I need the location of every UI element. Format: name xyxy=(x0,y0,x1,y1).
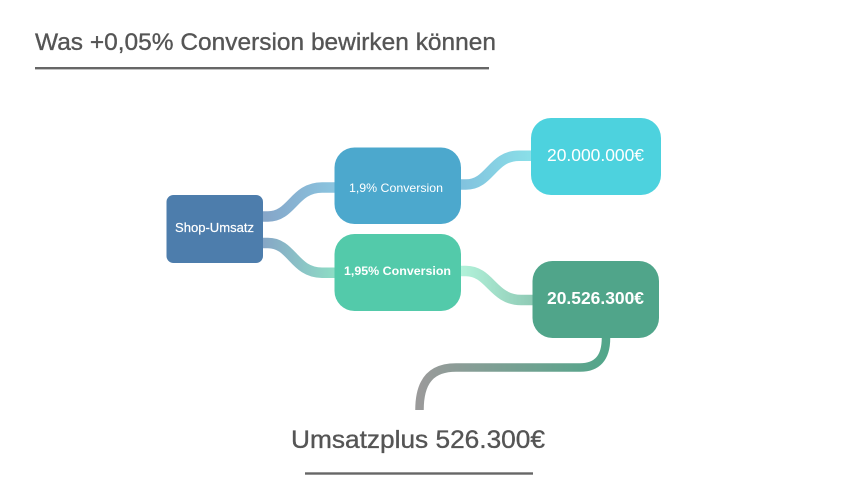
node: 20.526.300€ xyxy=(532,261,659,338)
node: 1,95% Conversion xyxy=(334,234,461,311)
title: Was +0,05% Conversion bewirken können xyxy=(35,29,496,56)
title underline xyxy=(35,67,489,69)
node: 20.000.000€ xyxy=(531,118,661,195)
node: Shop-Umsatz xyxy=(166,195,263,263)
result underline xyxy=(305,472,533,475)
arrow: 1,95% Conversion to 20.526.300€ xyxy=(461,271,533,300)
node: 1,95% Conversion: 1,95% Conversion xyxy=(344,264,451,278)
node: 20.000.000€: 20.000.000€ xyxy=(547,145,644,165)
node: 1,9% Conversion xyxy=(334,148,461,224)
arrow: Shop-Umsatz to 1,9% Conversion xyxy=(263,188,334,216)
result heading: Umsatzplus 526.300€ xyxy=(291,426,545,454)
node: 20.526.300€: 20.526.300€ xyxy=(547,288,644,308)
node: Shop-Umsatz: Shop-Umsatz xyxy=(175,221,254,235)
node: 1,9% Conversion: 1,9% Conversion xyxy=(349,181,443,195)
arrow: 1,9% Conversion to 20.000.000€ xyxy=(461,156,531,184)
arrow: Shop-Umsatz to 1,95% Conversion xyxy=(263,243,334,273)
arrow: 20.526.300€ to Umsatzplus xyxy=(420,338,606,410)
